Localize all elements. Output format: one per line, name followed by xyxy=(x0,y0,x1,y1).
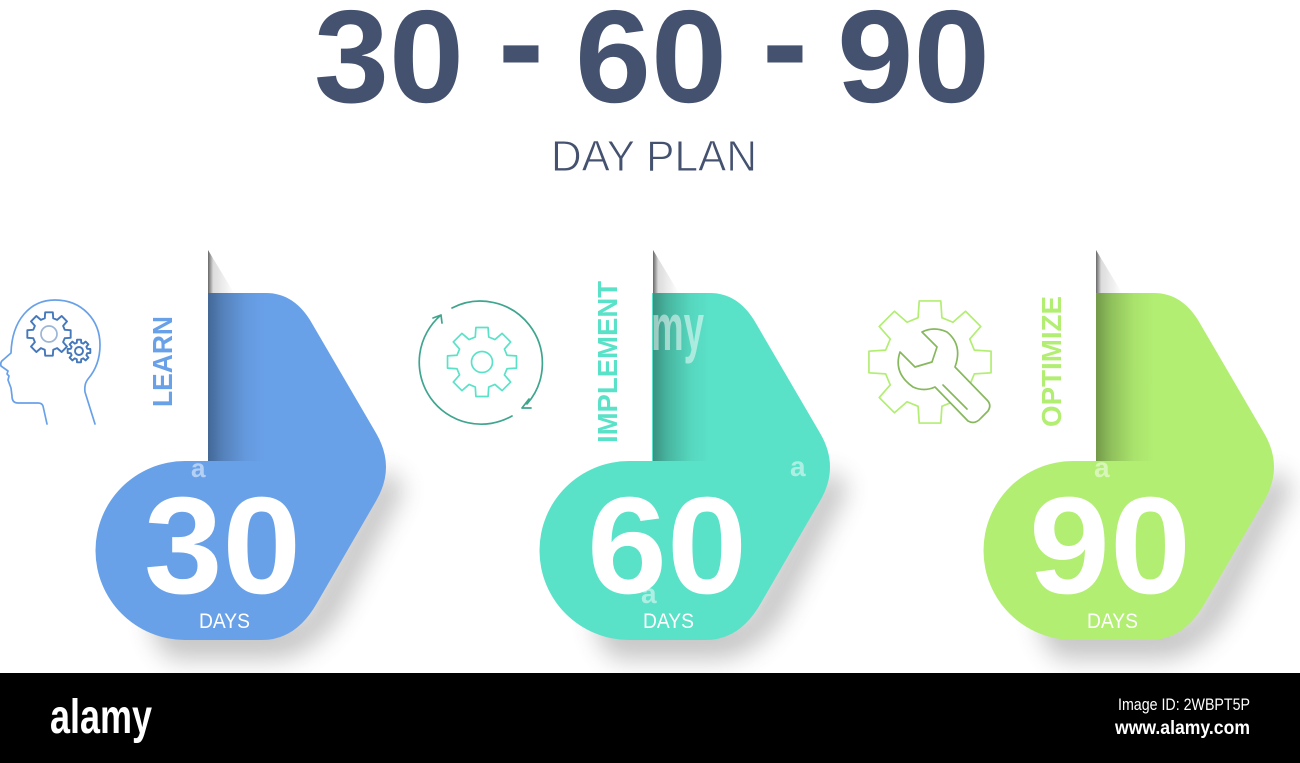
label: OPTIMIZE: OPTIMIZE xyxy=(1036,296,1067,427)
number: 60: 60 xyxy=(587,469,747,623)
watermark letters xyxy=(641,290,806,609)
subtitle: DAY PLAN: DAY PLAN xyxy=(551,132,757,181)
number: 90: 90 xyxy=(1029,469,1191,623)
footer logo: alamy: alamy xyxy=(50,691,152,744)
panel: 30 days learn xyxy=(1,250,404,660)
watermark letter: a xyxy=(191,453,206,483)
panel: 90 days optimize xyxy=(869,250,1292,660)
footer image id: Image ID: 2WBPT5P xyxy=(1118,695,1250,714)
badge: teal arrow shape xyxy=(540,293,830,640)
number: 30: 30 xyxy=(144,469,301,623)
icon: gear with wrench xyxy=(869,301,991,423)
label: IMPLEMENT: IMPLEMENT xyxy=(592,281,623,443)
label: LEARN: LEARN xyxy=(147,316,178,407)
label: DAYS: DAYS xyxy=(643,610,694,633)
badge: green arrow shape xyxy=(984,293,1274,640)
icon: head with gears xyxy=(1,300,100,424)
label: DAYS: DAYS xyxy=(1087,610,1138,633)
watermark letter: a xyxy=(1094,452,1110,483)
watermark letters: my xyxy=(651,290,704,364)
icon: gear with cycle arrows xyxy=(419,301,542,424)
watermark letters: a xyxy=(641,578,657,609)
title: 30 - 60 - 90 xyxy=(314,0,990,130)
label: DAYS: DAYS xyxy=(199,610,250,633)
footer bar xyxy=(0,673,1300,763)
footer url: www.alamy.com xyxy=(1114,718,1250,739)
panel: 60 days implement xyxy=(419,250,848,660)
badge: blue arrow shape xyxy=(95,293,386,640)
watermark letters: a xyxy=(790,451,806,482)
